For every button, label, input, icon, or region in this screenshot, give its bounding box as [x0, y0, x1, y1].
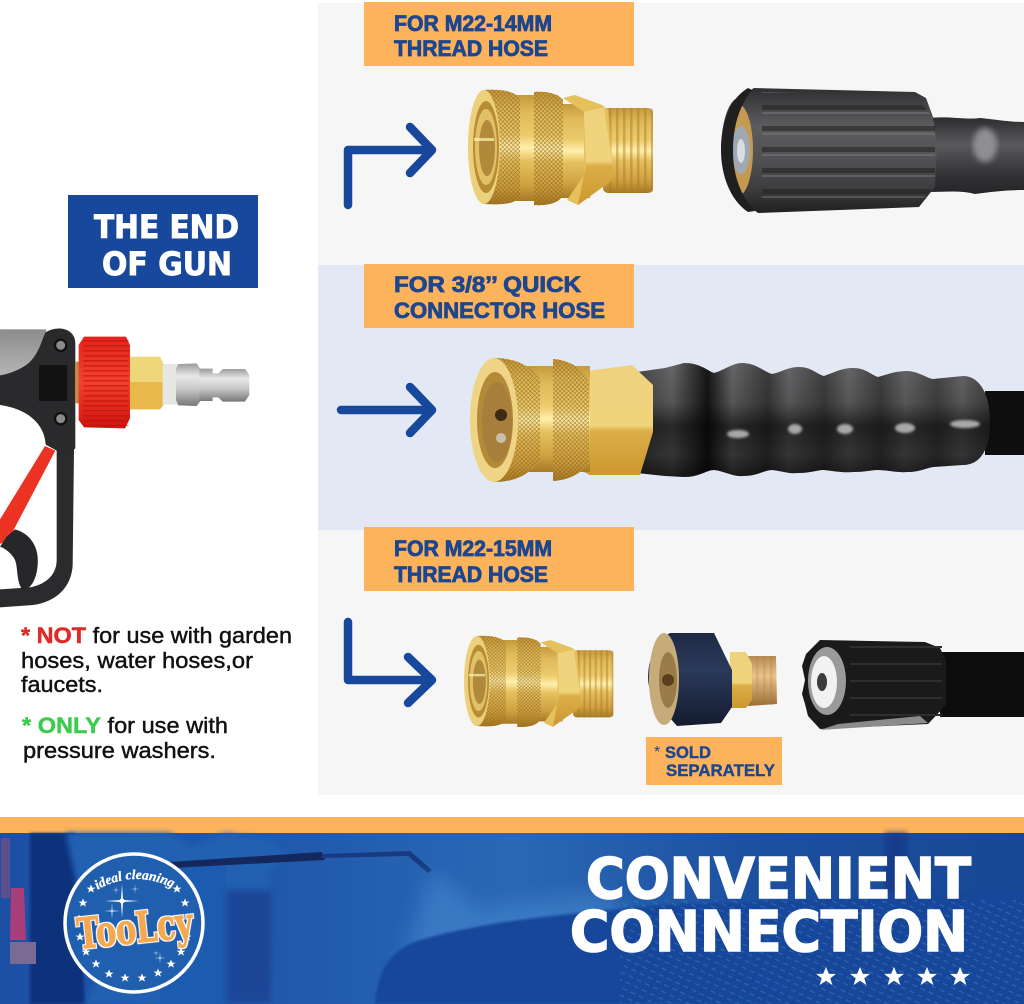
- spray mist: [400, 870, 640, 975]
- hose and knob: M22-15mm: [802, 640, 1024, 730]
- banner title: CONVENIENT: [586, 847, 971, 912]
- label: the end of gun: THE END: [94, 208, 239, 246]
- black trigger hook: [0, 529, 38, 591]
- gun body: [0, 329, 75, 451]
- screws: [55, 340, 66, 424]
- label: M22-15mm: [364, 527, 634, 591]
- label: 3/8 quick connector: [364, 264, 634, 328]
- worker silhouette: [66, 833, 290, 1004]
- logo tagline: ideal cleaning: [94, 870, 175, 890]
- logo wordmark: TooLcy: [75, 898, 196, 959]
- ring of stars: [74, 884, 192, 982]
- spray gun with quick connect plug: [0, 329, 249, 607]
- warning notes: [21, 623, 292, 763]
- footer banner background photo: [0, 833, 1024, 1004]
- adapter: sold separately part: [648, 633, 777, 726]
- orange strip: [0, 817, 1024, 833]
- copper ferrule: [75, 362, 85, 403]
- label: sold separately: SOLD: [665, 744, 711, 762]
- blue middle band: [318, 265, 1024, 530]
- logo badge: [63, 852, 205, 994]
- wall panel: [160, 866, 226, 1004]
- label: the end of gun: OF GUN: [102, 245, 232, 283]
- warning notes: * ONLY for use with: [22, 713, 228, 738]
- banner title: [570, 847, 971, 965]
- label: 3/8 quick connector: FOR 3/8’’ QUICK: [394, 272, 581, 297]
- silver hex: [176, 363, 200, 406]
- five stars: [816, 967, 970, 985]
- data plate: [39, 365, 67, 401]
- sparkles: [104, 884, 166, 964]
- bottle label: [10, 942, 36, 964]
- arrow: middle: [341, 387, 432, 433]
- white seal: [163, 364, 178, 405]
- warning notes: hoses, water hoses,or: [21, 648, 254, 673]
- label: M22-15mm: THREAD HOSE: [394, 562, 548, 587]
- arrow: bottom: [348, 622, 432, 703]
- label: 3/8 quick connector: CONNECTOR HOSE: [394, 298, 605, 323]
- hose and knob: M22-14mm: [721, 88, 1024, 213]
- label: sold separately: [646, 737, 782, 785]
- lance: [170, 852, 325, 868]
- red nut: [79, 337, 130, 428]
- label: M22-14mm: THREAD HOSE: [394, 36, 548, 61]
- gray grip inset: [0, 329, 47, 375]
- label: sold separately: *: [654, 744, 660, 761]
- red strip: [1, 838, 10, 898]
- label: M22-14mm: FOR M22-14MM: [394, 11, 552, 36]
- silver plug: [199, 369, 249, 402]
- arrow: top: [348, 127, 432, 205]
- brass connector: middle with ribbed hose: [470, 358, 1024, 482]
- label: the end of gun: [68, 195, 258, 288]
- label: sold separately: SEPARATELY: [666, 762, 775, 780]
- brass connector: top: [468, 90, 653, 205]
- dark pillar: [885, 833, 907, 893]
- warning notes: pressure washers.: [23, 738, 216, 763]
- brass connector: bottom: [464, 636, 613, 727]
- background panel: [318, 3, 1024, 795]
- gun handle frame: [0, 448, 74, 607]
- vehicle rear: [226, 890, 272, 1004]
- brass hex: [130, 357, 163, 409]
- warning notes: faucets.: [21, 672, 103, 697]
- red trigger: [0, 446, 55, 544]
- label: M22-14mm: [364, 2, 634, 66]
- banner title: CONNECTION: [570, 900, 968, 965]
- car hood: [375, 892, 1024, 1004]
- bottle: [10, 888, 26, 940]
- left dark wall: [30, 833, 85, 1004]
- warning notes: * NOT for use with garden: [21, 623, 292, 648]
- label: M22-15mm: FOR M22-15MM: [394, 536, 552, 561]
